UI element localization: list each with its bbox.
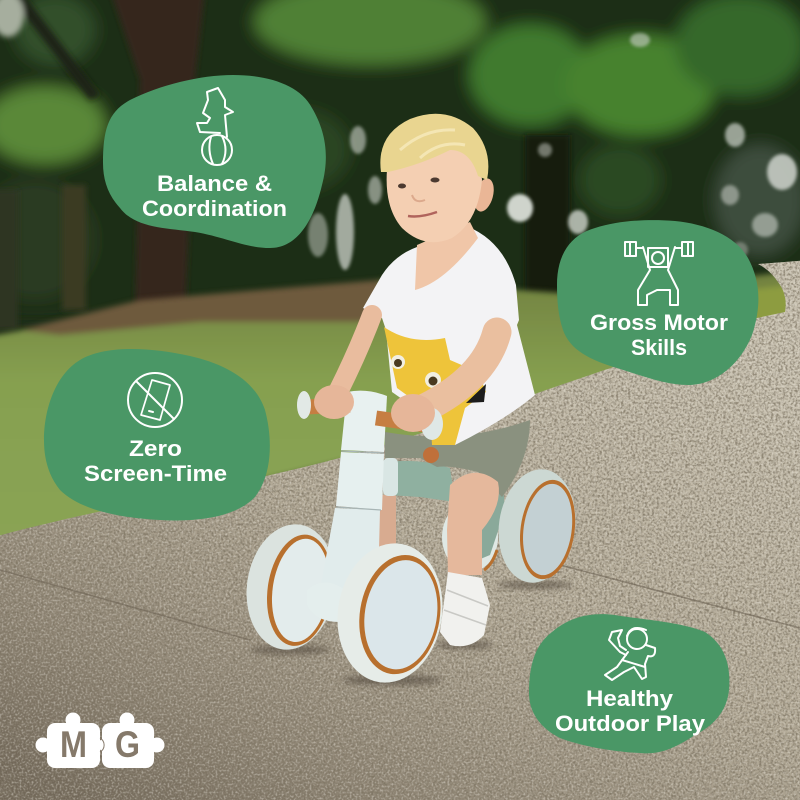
face features: [398, 178, 440, 216]
front left wheel: [239, 518, 343, 656]
icon: weightlifter: [625, 242, 693, 305]
icon: running child: [605, 628, 655, 680]
icon: no phone: [128, 373, 182, 427]
label: Outdoor Play: [555, 711, 706, 736]
label: Coordination: [142, 196, 287, 221]
bike column: [307, 391, 387, 622]
label: [555, 686, 706, 736]
label: Balance &: [157, 171, 272, 196]
label: Zero: [129, 436, 182, 461]
neck: [415, 222, 478, 290]
callout: balance and coordination: [103, 75, 326, 248]
label: [590, 310, 728, 360]
callout: gross motor skills: [557, 220, 758, 385]
label: Skills: [631, 335, 687, 360]
label: Screen-Time: [84, 461, 227, 486]
label: Healthy: [586, 686, 674, 711]
logo: MG puzzle pieces: G: [115, 724, 140, 765]
rear hidden wheel: [442, 502, 498, 572]
head: [380, 114, 497, 242]
far leg: [378, 495, 396, 547]
shorts: [385, 420, 530, 497]
shirt: [363, 229, 535, 445]
seat knob: [423, 447, 439, 463]
label: [142, 171, 287, 221]
leg: [447, 473, 499, 575]
white shoe: [440, 572, 490, 646]
grass: [0, 270, 800, 550]
icon: bear on ball: [197, 88, 233, 165]
lion print: [384, 327, 486, 445]
callout: zero screen-time: [44, 349, 270, 520]
hands: [314, 385, 435, 432]
child riding the balance bike: [239, 114, 583, 690]
label: [84, 436, 227, 486]
callout: healthy outdoor play: [529, 614, 729, 753]
front right wheel: [328, 536, 452, 690]
rear right wheel: [491, 464, 583, 588]
bokeh highlights: [308, 33, 797, 270]
wheel ground shadows: [250, 581, 573, 685]
logo: MG puzzle pieces: M: [60, 724, 87, 765]
concrete path: [0, 255, 800, 800]
logo: MG puzzle pieces: [36, 712, 164, 768]
label: Gross Motor: [590, 310, 728, 335]
handlebar: [297, 391, 443, 440]
green bike seat body: [383, 458, 505, 560]
arms: [338, 315, 497, 408]
